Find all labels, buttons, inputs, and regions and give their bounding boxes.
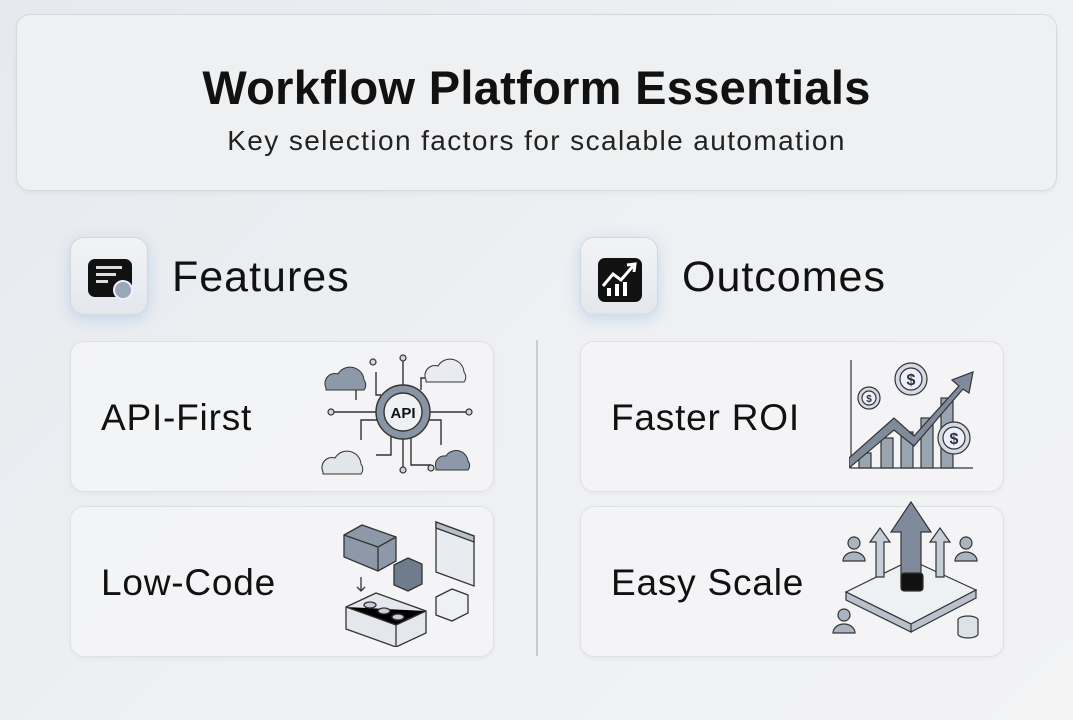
card: Easy Scale: Easy Scale (611, 562, 804, 603)
icon: features (70, 237, 148, 315)
icon: outcomes (580, 237, 658, 315)
heading: Features: Features (172, 253, 350, 301)
icon: API gear: API (390, 405, 416, 422)
card: Low-Code (70, 506, 494, 657)
title: Workflow Platform Essentials (202, 61, 871, 114)
icon: scale platform (832, 501, 979, 639)
card: Faster ROI: Faster ROI (611, 397, 800, 438)
heading: Outcomes: Outcomes (682, 253, 886, 301)
icon: blocks (343, 521, 475, 647)
card: API-First (70, 341, 494, 492)
icon: growth chart (849, 360, 974, 469)
card: Low-Code: Low-Code (101, 562, 276, 603)
card: Easy Scale (580, 506, 1004, 657)
subtitle: Key selection factors for scalable automation (227, 125, 846, 156)
icon: growth chart: $ (866, 394, 872, 405)
card: Faster ROI (580, 341, 1004, 492)
icon: growth chart: $ (950, 431, 959, 448)
icon: API gear (321, 354, 473, 474)
card: API-First: API-First (101, 397, 252, 438)
header panel (16, 14, 1057, 191)
divider (536, 340, 538, 656)
icon: growth chart: $ (907, 372, 916, 389)
